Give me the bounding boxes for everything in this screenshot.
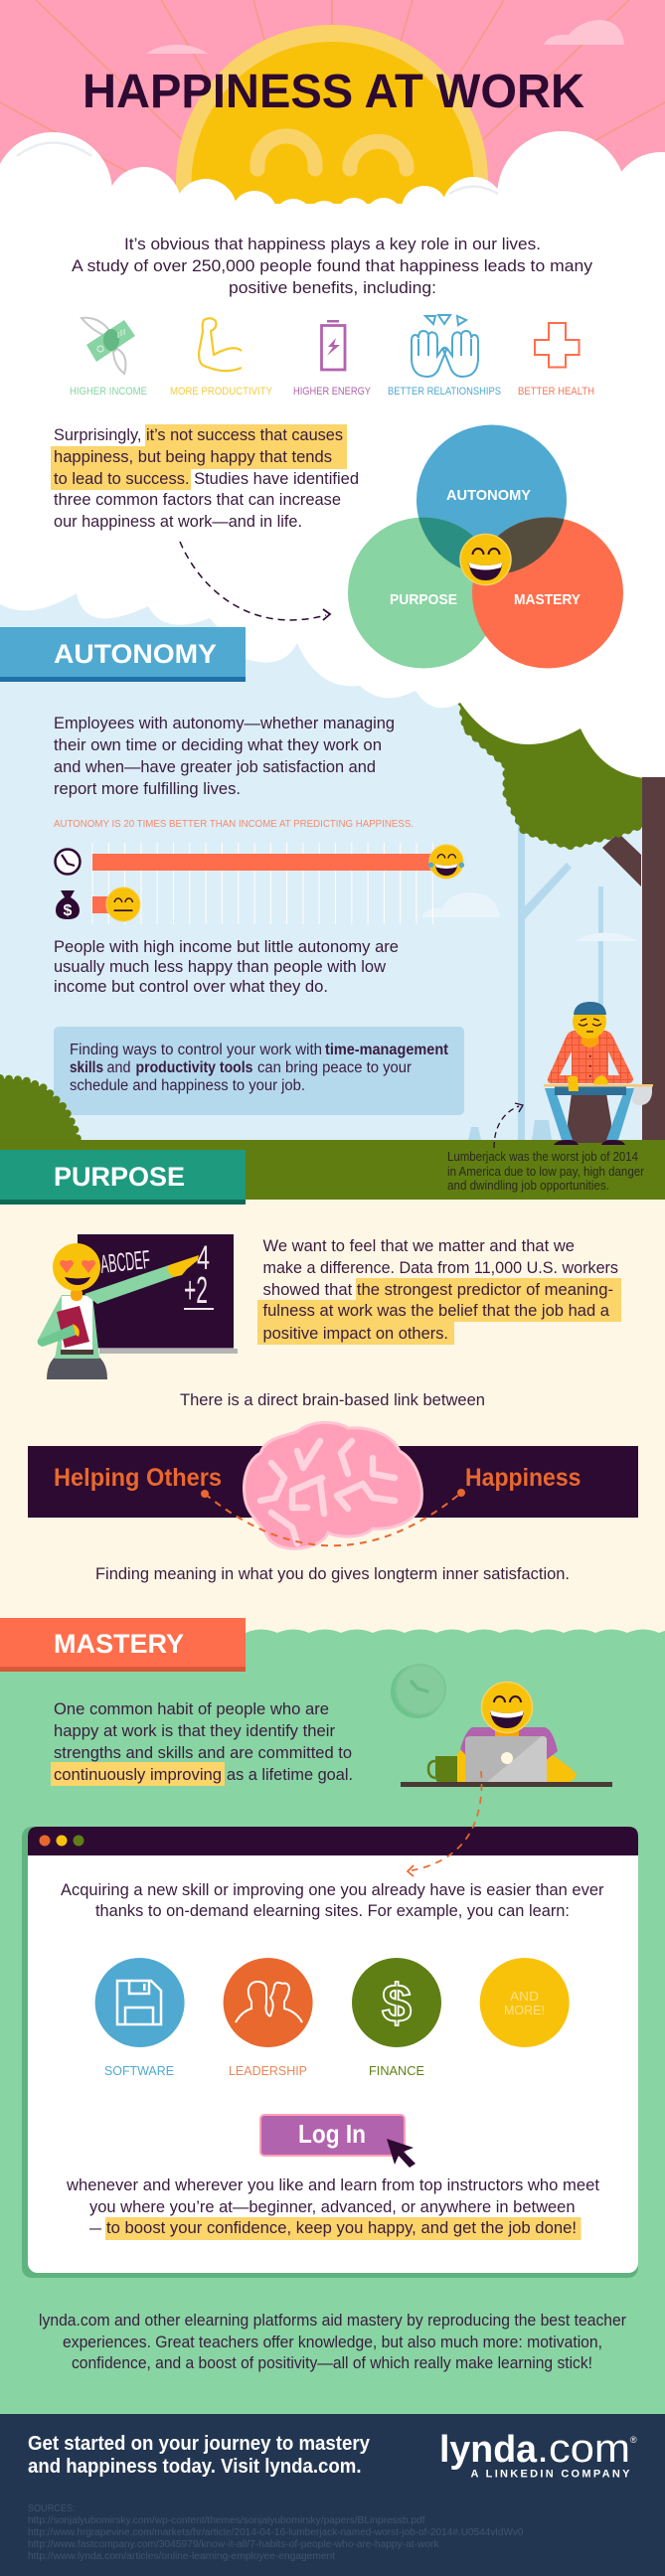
mastery paragraph — [51, 1699, 353, 1786]
teacher at blackboard: 4 — [197, 1239, 210, 1277]
course: finance: $ — [382, 1974, 412, 2033]
purpose paragraph: fulness at work was the belief that the job had a — [262, 1301, 610, 1320]
lumberjack note: and dwindling job opportunities. — [447, 1179, 609, 1193]
benefit labels: BETTER HEALTH — [518, 386, 594, 398]
lynda paragraph: lynda.com and other elearning platforms aid mastery by reproducing the best teacher — [39, 2311, 626, 2330]
left arm — [38, 1325, 77, 1347]
banner: mastery: MASTERY — [54, 1629, 184, 1659]
course: finance: FINANCE — [369, 2063, 424, 2078]
window closing text: you where you’re at—beginner, advanced, or anywhere in between — [89, 2197, 575, 2216]
axe — [632, 1086, 652, 1105]
bar chart: autonomy vs income — [56, 843, 464, 924]
window intro text — [61, 1880, 604, 1920]
emoji: neutral — [106, 887, 140, 921]
belt — [61, 1350, 93, 1355]
stump — [568, 1093, 611, 1143]
skirt — [47, 1354, 107, 1379]
course: and more: AND — [510, 1989, 539, 2004]
lynda paragraph — [39, 2311, 626, 2372]
person at laptop — [401, 1682, 612, 1787]
browser window panel — [22, 1827, 638, 2278]
lynda paragraph: experiences. Great teachers offer knowledge, but also much more: motivation, — [63, 2333, 602, 2351]
background: light blue autonomy section with white scalloped edge — [0, 497, 665, 1153]
paragraph: income vs autonomy: income but control over what they do. — [54, 977, 328, 996]
intro text: A study of over 250,000 people found that happiness leads to many — [72, 256, 593, 275]
shirt buttons — [589, 1055, 590, 1077]
callout: time management: and — [107, 1059, 131, 1076]
shirt — [62, 1296, 92, 1350]
venn diagram — [348, 425, 623, 668]
autonomy paragraph: report more fulfilling lives. — [54, 779, 241, 798]
course: and more — [480, 1958, 570, 2047]
call to action: and happiness today. Visit lynda.com. — [28, 2456, 362, 2478]
sources: http://www.lynda.com/articles/online-learning-employee-engagement — [28, 2551, 335, 2562]
icon: health cross — [535, 323, 579, 368]
head with heart eyes — [53, 1243, 100, 1291]
bar: income — [92, 896, 110, 913]
arrow to venn — [180, 542, 330, 620]
autonomy paragraph: and when—have greater job satisfaction and — [54, 757, 376, 776]
intro text: It’s obvious that happiness plays a key role in our lives. — [124, 235, 541, 253]
window body — [28, 1827, 638, 2273]
banner: autonomy — [0, 627, 246, 682]
dark band — [28, 1446, 638, 1518]
purpose paragraph: showed that the strongest predictor of meaning- — [262, 1280, 613, 1299]
shirt — [548, 1031, 633, 1083]
logo: lynda.com: .com — [537, 2427, 630, 2471]
banner: purpose: PURPOSE — [54, 1162, 185, 1192]
course: and more: MORE! — [504, 2003, 545, 2017]
plank — [544, 1084, 653, 1087]
venn text block: to lead to success. Studies have identified — [54, 469, 359, 488]
callout: time management: skills — [70, 1059, 103, 1076]
brain — [245, 1422, 421, 1548]
call to action: Get started on your journey to mastery — [28, 2433, 371, 2455]
mug — [435, 1756, 457, 1782]
head — [481, 1682, 533, 1733]
ground — [0, 1140, 665, 1200]
course: leadership — [224, 1958, 313, 2078]
title: HAPPINESS AT WORK — [83, 66, 584, 118]
emoji: center smile — [460, 535, 511, 584]
icon: clock — [56, 849, 80, 875]
callout: time management — [54, 1027, 464, 1115]
benefit labels: HIGHER ENERGY — [293, 386, 372, 398]
icon: money bag: $ — [64, 902, 73, 919]
neck — [582, 1034, 598, 1047]
sources: http://www.hrgrapevine.com/markets/hr/article/2014-04-16-lumberjack-named-worst-job-of-2014#.U0544vldWv0 — [28, 2527, 524, 2538]
callout: time management: schedule and happiness to your job. — [70, 1077, 305, 1094]
course: software: SOFTWARE — [104, 2063, 174, 2078]
lynda paragraph: confidence, and a boost of positivity—all of which really make learning stick! — [72, 2353, 592, 2372]
callout: time management: Finding ways to control your work with — [70, 1042, 322, 1058]
small clouds — [421, 892, 500, 917]
venn text block: happiness, but being happy that tends — [54, 447, 332, 466]
teacher at blackboard: ABCDEF — [98, 1244, 151, 1279]
call to action — [28, 2433, 371, 2478]
logo: lynda.com: A LINKEDIN COMPANY — [471, 2469, 630, 2481]
brain link diagram: Helping Others — [54, 1464, 222, 1492]
background: cream purpose section — [0, 1200, 665, 1637]
brain link diagram: Happiness — [465, 1464, 581, 1492]
footer — [0, 2414, 665, 2576]
sun rays — [0, 0, 665, 283]
banner: purpose — [0, 1150, 246, 1205]
callout: time management: can bring peace to your — [257, 1059, 412, 1076]
window intro text: Acquiring a new skill or improving one you already have is easier than ever — [61, 1880, 604, 1899]
dashed link — [205, 1493, 461, 1545]
paragraph: income vs autonomy — [54, 937, 399, 996]
window shadow — [22, 1827, 638, 2278]
legs — [545, 1088, 634, 1140]
benefits row — [70, 315, 594, 398]
window intro text: thanks to on-demand elearning sites. For example, you can learn: — [95, 1901, 570, 1920]
window closing text: to boost your confidence, keep you happy, and get the job done! — [106, 2218, 577, 2237]
emoji: laughing — [428, 845, 464, 879]
book — [57, 1306, 89, 1348]
neck — [495, 1724, 519, 1736]
pointing arm — [84, 1265, 174, 1304]
lumberjack — [544, 1002, 653, 1145]
bar: autonomy — [92, 854, 432, 871]
autonomy paragraph: Employees with autonomy—whether managing — [54, 714, 395, 732]
mastery paragraph: happy at work is that they identify their — [54, 1721, 335, 1740]
window closing text — [66, 2175, 599, 2240]
course: finance — [352, 1958, 441, 2078]
small cloud right — [544, 20, 624, 45]
jacket — [38, 1295, 99, 1359]
background: green mastery section — [0, 1630, 665, 2414]
mastery paragraph: strengths and skills and are committed to — [54, 1743, 352, 1762]
tree trunk — [642, 777, 665, 1143]
mastery paragraph: One common habit of people who are — [54, 1699, 329, 1718]
venn diagram: AUTONOMY — [446, 487, 531, 504]
background tree poles — [468, 823, 603, 1140]
banner: autonomy: AUTONOMY — [54, 639, 217, 669]
purpose takeaway: Finding meaning in what you do gives longterm inner satisfaction. — [95, 1564, 570, 1583]
venn text block — [51, 424, 359, 531]
sources: SOURCES: — [28, 2503, 76, 2514]
shoulders — [460, 1727, 558, 1761]
pointing hand — [168, 1255, 199, 1277]
highlight — [257, 1278, 621, 1345]
brain link lead-in: There is a direct brain-based link between — [180, 1390, 485, 1409]
tree branch — [602, 833, 641, 886]
teacher at blackboard: +2 — [184, 1270, 208, 1312]
venn diagram: PURPOSE — [390, 591, 457, 608]
foliage solid — [462, 696, 665, 846]
blackboard — [78, 1234, 234, 1348]
arrow: lumberjack note — [494, 1103, 523, 1148]
tree foliage — [462, 696, 665, 846]
teacher at blackboard — [38, 1234, 238, 1379]
venn text block: our happiness at work—and in life. — [54, 512, 302, 531]
desk — [401, 1782, 612, 1787]
lumberjack note — [447, 1150, 644, 1193]
paragraph: income vs autonomy: usually much less happy than people with low — [54, 957, 387, 976]
callout: time management: time-management — [325, 1042, 448, 1058]
autonomy paragraph: their own time or deciding what they work on — [54, 735, 382, 754]
venn diagram: MASTERY — [514, 591, 581, 608]
shoes — [554, 1140, 625, 1145]
purpose paragraph: make a difference. Data from 11,000 U.S. workers — [262, 1258, 618, 1277]
neck — [71, 1288, 83, 1301]
wall clock — [391, 1665, 445, 1718]
benefit labels: BETTER RELATIONSHIPS — [388, 386, 501, 398]
benefit labels: HIGHER INCOME — [70, 386, 147, 398]
hands — [568, 1075, 608, 1091]
header: pink sky with sun and clouds — [0, 0, 665, 621]
mastery paragraph: continuously improving — [54, 1765, 222, 1784]
course: leadership: LEADERSHIP — [229, 2063, 307, 2078]
icon: cursor — [387, 2139, 416, 2168]
benefit labels: MORE PRODUCTIVITY — [170, 386, 273, 398]
laptop — [465, 1736, 547, 1782]
mastery paragraph: as a lifetime goal. — [227, 1765, 353, 1784]
sun — [176, 25, 488, 337]
venn text block: Surprisingly, it’s not success that causes — [54, 425, 343, 444]
icon: money bag — [56, 890, 80, 919]
callout: time management: productivity tools — [135, 1059, 252, 1076]
clouds — [0, 131, 665, 621]
arrow: laptop to window — [408, 1771, 481, 1876]
small cloud left — [146, 45, 208, 54]
icon: raised hands — [412, 315, 478, 377]
log in button: Log In — [298, 2119, 366, 2149]
venn text block: three common factors that can increase — [54, 490, 341, 509]
purpose paragraph — [257, 1236, 621, 1345]
banner: mastery — [0, 1618, 246, 1672]
head — [573, 1005, 606, 1039]
icon: battery — [322, 320, 345, 370]
intro text: positive benefits, including: — [229, 278, 436, 297]
arms — [449, 1749, 577, 1782]
chart caption: AUTONOMY IS 20 TIMES BETTER THAN INCOME AT PREDICTING HAPPINESS. — [54, 818, 414, 830]
window closing text: — — [89, 2218, 101, 2237]
lumberjack note: in America due to low pay, high danger — [447, 1165, 644, 1179]
bush — [0, 1078, 79, 1143]
title bar — [28, 1827, 638, 1855]
course: software — [95, 1958, 185, 2078]
purpose paragraph: positive impact on others. — [262, 1324, 448, 1343]
logo: lynda.com: ® — [630, 2435, 637, 2445]
paragraph: income vs autonomy: People with high income but little autonomy are — [54, 937, 399, 956]
icon: money with wings — [82, 318, 135, 374]
icon: flexed arm — [199, 318, 242, 371]
benefit labels — [70, 386, 594, 398]
autonomy paragraph — [54, 714, 395, 798]
brain link diagram — [28, 1422, 638, 1548]
sources: http://www.fastcompany.com/3045979/know-it-all/7-habits-of-people-who-are-happy-at-work — [28, 2539, 440, 2550]
brain folds — [260, 1441, 395, 1543]
sources — [28, 2503, 524, 2562]
purpose paragraph: We want to feel that we matter and that we — [262, 1236, 575, 1255]
logo: lynda.com — [439, 2427, 637, 2481]
log in button — [260, 2115, 405, 2156]
intro text — [72, 235, 593, 297]
lumberjack note: Lumberjack was the worst job of 2014 — [447, 1150, 638, 1164]
sources: http://sonjalyubomirsky.com/wp-content/themes/sonjalyubomirsky/papers/BLinpressb.pdf — [28, 2515, 425, 2526]
highlight — [51, 424, 347, 490]
logo: lynda.com: lynda — [439, 2429, 538, 2471]
window closing text: whenever and wherever you like and learn from top instructors who meet — [66, 2175, 599, 2194]
